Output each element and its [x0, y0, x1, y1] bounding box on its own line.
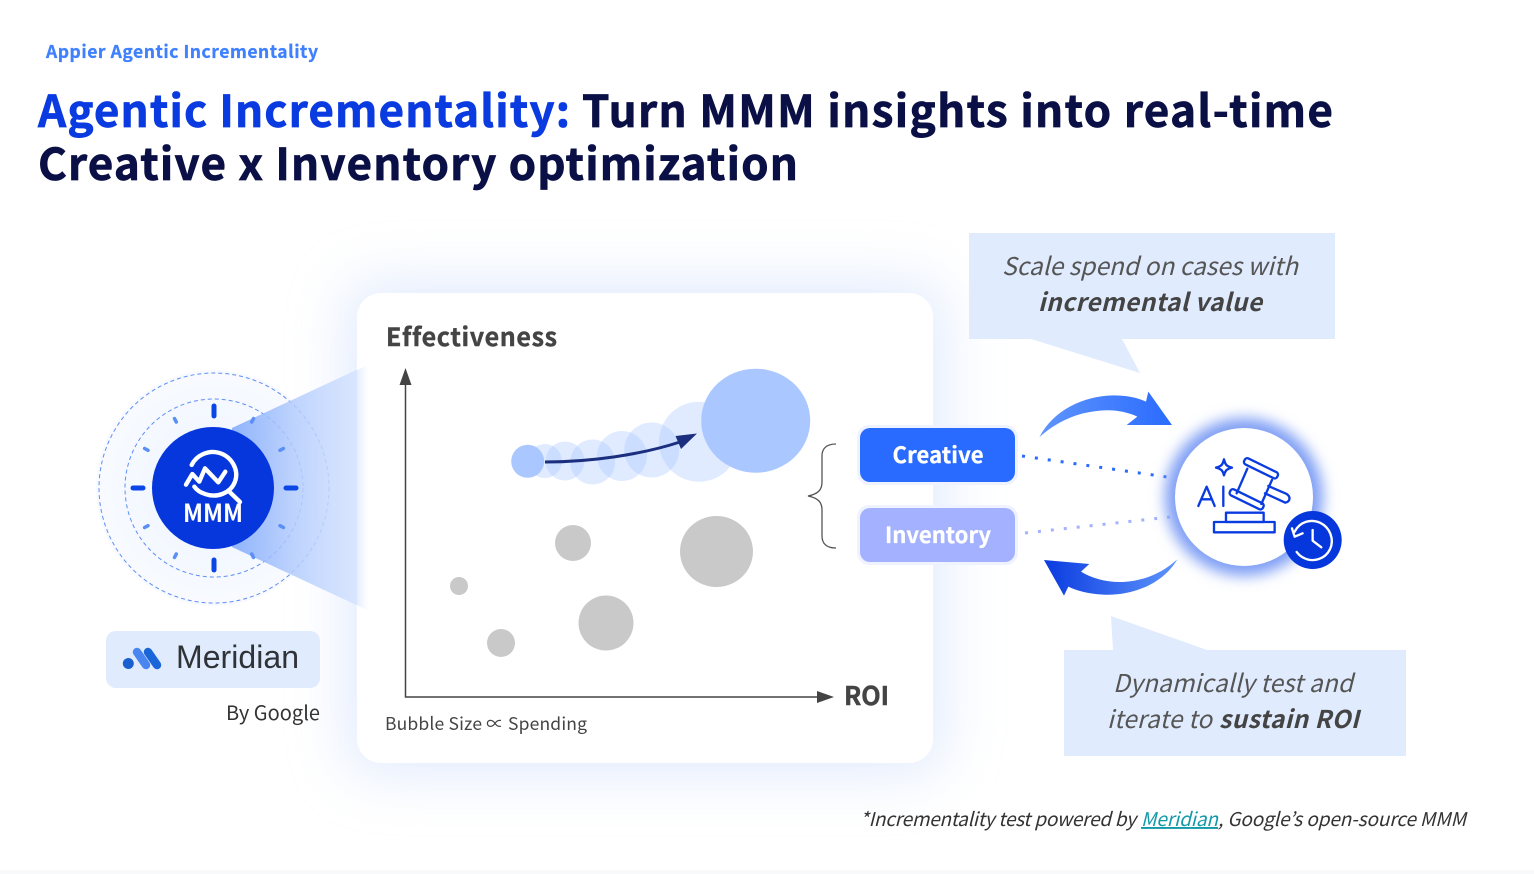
- start and end bubbles: [511, 369, 810, 478]
- icon: AI gavel: [1198, 457, 1289, 532]
- icon: Meridian logo: [123, 652, 157, 669]
- eyebrow label: Appier Agentic Incrementality: [45, 39, 318, 64]
- blue bubble trail: [528, 402, 739, 484]
- ROI label: ROI: [844, 676, 889, 713]
- footnote: Meridian: [1141, 805, 1219, 832]
- title: [37, 76, 1333, 193]
- panel: effectiveness chart card: [357, 293, 933, 763]
- callout: dynamically test: sustain ROI: [1219, 701, 1362, 736]
- card glow: [345, 281, 945, 775]
- growth arrow: [545, 434, 697, 462]
- footnote: , Google’s open-source MMM: [1218, 805, 1468, 832]
- button: Creative: [857, 425, 1018, 485]
- title: Agentic Incrementality:: [37, 76, 570, 140]
- dashed rings: [99, 373, 329, 603]
- callout: scale spend: Scale spend on cases with: [1002, 248, 1299, 283]
- callout: scale spend: incremental value: [1038, 284, 1265, 319]
- label: MMM: MMM: [183, 494, 243, 530]
- main circle: [152, 427, 274, 549]
- footnote: *Incrementality test powered by: [860, 805, 1139, 832]
- arrow: top: [1039, 392, 1172, 437]
- callout: dynamically test: iterate to: [1107, 701, 1214, 736]
- panel: Meridian badge: [106, 631, 320, 688]
- glow: [1165, 418, 1323, 576]
- footnote: [860, 805, 1468, 832]
- icon: clock badge: [1284, 511, 1342, 569]
- arrow: bottom: [1044, 559, 1177, 596]
- By Google: By Google: [226, 697, 320, 726]
- chart heading: Effectiveness: [386, 318, 557, 354]
- ticks: [133, 406, 296, 570]
- Meridian wordmark: Meridian: [176, 639, 299, 675]
- callout: scale spend: [969, 233, 1335, 373]
- axes: [400, 368, 834, 703]
- button: Inventory: Inventory: [885, 518, 991, 550]
- AI agent circle: [1165, 418, 1342, 576]
- title: Turn MMM insights into real-time: [582, 76, 1333, 140]
- cycle arrows: [1039, 392, 1177, 596]
- brace: [808, 444, 836, 548]
- gray bubbles: [450, 516, 753, 657]
- cone fade over card edge: [357, 365, 368, 611]
- callout: dynamically test: Dynamically test and: [1113, 665, 1356, 700]
- button: Creative: Creative: [892, 438, 984, 470]
- legend note: Bubble Size ∝ Spending: [385, 711, 587, 736]
- title: Creative x Inventory optimization: [38, 129, 798, 193]
- bottom strip: [0, 870, 1534, 874]
- icon: MMM radar: [96, 365, 367, 610]
- icon: magnifier chart: [186, 452, 240, 502]
- button: Inventory: [857, 505, 1018, 565]
- cone beam: [232, 365, 367, 610]
- dotted connectors: [1022, 456, 1170, 533]
- callout: dynamically test: [1064, 616, 1406, 756]
